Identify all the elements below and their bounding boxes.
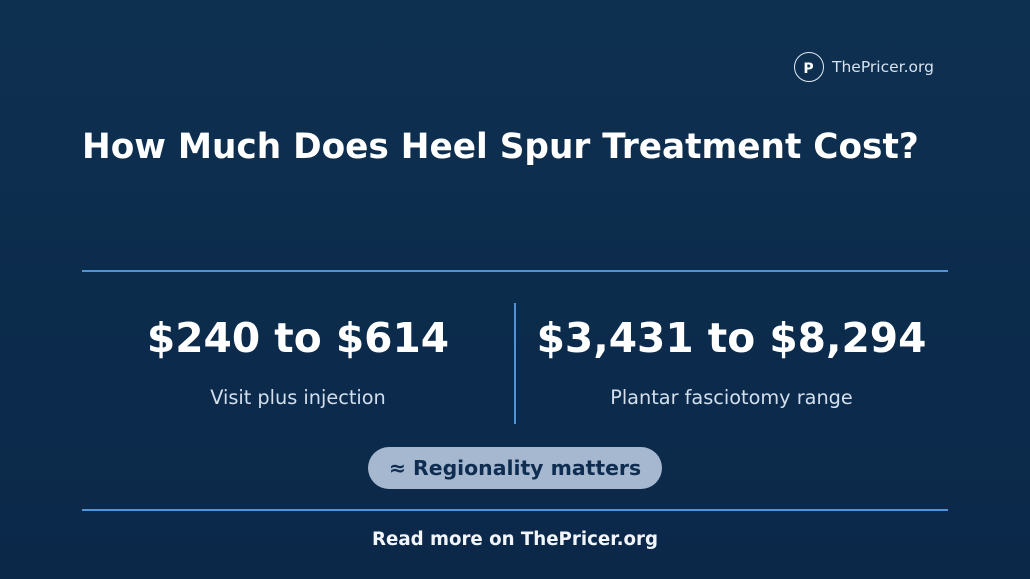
icon: P circle: P — [803, 61, 814, 77]
value: $3,431 to $8,294 — [537, 314, 926, 362]
logo text: ThePricer.org — [832, 58, 934, 76]
footer: Read more on ThePricer.org — [372, 529, 658, 550]
caption: Plantar fasciotomy range — [610, 386, 853, 408]
pill: regionality: ≈ Regionality matters — [389, 456, 641, 480]
pill: regionality — [368, 447, 662, 489]
stat: plantar fasciotomy — [537, 314, 926, 408]
value: $240 to $614 — [147, 314, 449, 362]
stat: visit plus injection — [147, 314, 449, 408]
title: How Much Does Heel Spur Treatment Cost? — [82, 127, 919, 167]
icon: P circle — [794, 52, 824, 82]
logo — [794, 52, 934, 82]
caption: Visit plus injection — [210, 386, 386, 408]
